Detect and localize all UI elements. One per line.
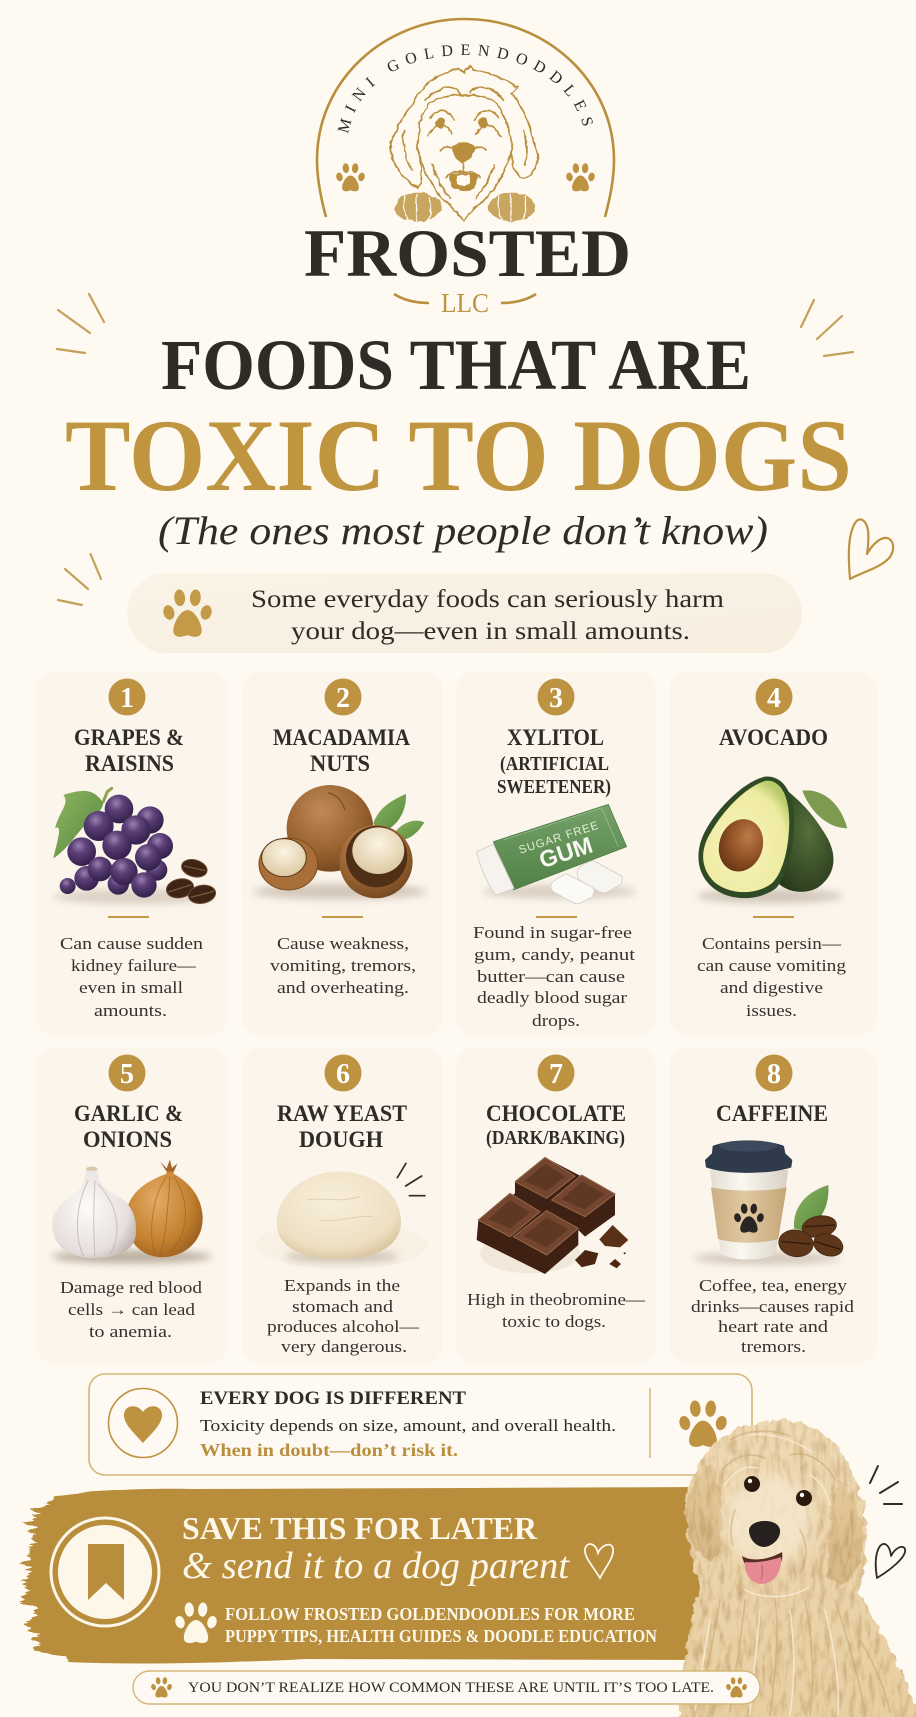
heading: CAFFEINE <box>716 1101 828 1126</box>
description <box>691 1276 855 1356</box>
illustration: sugar free gum: SUGAR FREE <box>517 819 601 857</box>
heading: CHOCOLATE <box>486 1101 626 1126</box>
dog mouth and tongue <box>742 1552 782 1584</box>
description <box>473 923 635 1030</box>
number badge 4: 4 <box>767 683 781 714</box>
fur strokes <box>694 1431 890 1715</box>
icon: paw left <box>150 1677 173 1697</box>
icon: paw <box>162 589 213 637</box>
number badge 2 <box>324 678 362 716</box>
description: amounts. <box>94 1001 167 1020</box>
description <box>697 934 847 1020</box>
number badge 6: 6 <box>336 1059 350 1090</box>
number badge 8: 8 <box>767 1059 781 1090</box>
follow text: FOLLOW FROSTED GOLDENDOODLES FOR MORE <box>225 1604 635 1624</box>
description: Cause weakness, <box>277 934 409 953</box>
title line 1: FOODS THAT ARE <box>161 325 751 405</box>
logo wordmark FROSTED: FROSTED <box>304 215 631 291</box>
description: and digestive <box>720 978 823 997</box>
heading: SWEETENER) <box>497 776 611 798</box>
decorative rays top left <box>57 294 104 353</box>
logo dog line drawing <box>390 66 537 222</box>
heading <box>497 725 611 798</box>
follow text: PUPPY TIPS, HEALTH GUIDES & DOODLE EDUCATION <box>225 1626 657 1646</box>
number badge 8 <box>756 1054 792 1092</box>
panel: 5 garlic and onions <box>36 1047 228 1364</box>
heading: DOUGH <box>299 1127 383 1152</box>
logo: Frosted Mini Goldendoodles <box>304 18 631 318</box>
number badge 1: 1 <box>120 683 134 714</box>
divider <box>108 916 149 918</box>
description: Can cause sudden <box>60 934 204 953</box>
dog nose <box>749 1521 780 1547</box>
heading <box>74 1101 183 1152</box>
logo paw right <box>565 163 596 191</box>
icon: white paw <box>174 1602 218 1643</box>
illustration: sugar free gum: GUM <box>536 832 596 873</box>
description: Damage red blood <box>60 1278 203 1297</box>
brush stroke background <box>28 1487 720 1663</box>
logo arch <box>317 19 614 217</box>
icon: outlined black heart <box>876 1544 905 1578</box>
logo LLC: LLC <box>441 288 489 318</box>
callout emphasis: When in doubt—don’t risk it. <box>200 1440 458 1460</box>
logo dog paws <box>394 192 536 222</box>
description: butter—can cause <box>477 967 625 986</box>
title line 2: TOXIC TO DOGS <box>65 399 852 513</box>
description: even in small <box>79 978 183 997</box>
panel: 8 caffeine <box>669 1047 877 1364</box>
panel: 4 avocado <box>669 671 877 1036</box>
number badge 3: 3 <box>549 683 563 714</box>
description: vomiting, tremors, <box>270 956 416 975</box>
follow text <box>225 1604 657 1646</box>
description: deadly blood sugar <box>477 988 627 1007</box>
intro pill <box>127 573 802 653</box>
intro pill: your dog—even in small amounts. <box>291 616 690 645</box>
heading: (ARTIFICIAL <box>500 753 609 775</box>
number badge 6 <box>324 1054 362 1092</box>
panel: 6 raw yeast dough <box>242 1047 443 1364</box>
description: stomach and <box>292 1297 394 1316</box>
panel: 2 macadamia nuts <box>242 671 443 1036</box>
description <box>267 1276 420 1356</box>
heading: XYLITOL <box>507 725 604 750</box>
description: Found in sugar-free <box>473 923 632 942</box>
heading <box>486 1101 626 1149</box>
divider <box>536 916 577 918</box>
number badge 5 <box>108 1054 146 1092</box>
callout: every dog is different <box>89 1374 752 1475</box>
number badge 1 <box>108 678 146 716</box>
heading: GRAPES & <box>74 725 184 750</box>
logo curved text: MINI GOLDENDODDLES <box>338 44 593 134</box>
dog silhouette and coat <box>678 1420 916 1717</box>
subtitle: (The ones most people don’t know) <box>158 508 768 553</box>
illustration: garlic and onion <box>52 1159 212 1263</box>
icon: paw right <box>725 1677 748 1697</box>
heading: (DARK/BAKING) <box>486 1127 625 1149</box>
number badge 5: 5 <box>120 1059 134 1090</box>
icon: outlined heart <box>849 519 893 579</box>
panel: save banner <box>28 1487 720 1663</box>
illustration: dough ball <box>256 1163 428 1269</box>
heading: ONIONS <box>83 1127 172 1152</box>
number badge 2: 2 <box>336 683 350 714</box>
banner script line: & send it to a dog parent <box>182 1545 570 1587</box>
description <box>467 1290 646 1331</box>
description <box>60 934 204 1020</box>
description: issues. <box>746 1001 797 1020</box>
description: very dangerous. <box>281 1337 407 1356</box>
description: heart rate and <box>718 1317 829 1336</box>
heading <box>277 1101 407 1152</box>
dog muzzle highlight <box>724 1474 812 1566</box>
heading: NUTS <box>310 751 370 776</box>
heading: GARLIC & <box>74 1101 183 1126</box>
illustration: sugar free gum <box>477 804 637 904</box>
number badge 4 <box>756 678 792 716</box>
description: Coffee, tea, energy <box>699 1276 848 1295</box>
icon: outlined heart <box>585 1544 613 1578</box>
description: and overheating. <box>277 978 409 997</box>
dog ears <box>685 1462 864 1583</box>
heading <box>273 725 410 776</box>
panel: 3 xylitol <box>456 671 656 1036</box>
banner heading: SAVE THIS FOR LATER <box>182 1510 538 1546</box>
decorative rays mid left <box>58 554 101 605</box>
description: produces alcohol— <box>267 1317 420 1336</box>
heading <box>74 725 184 776</box>
motion lines <box>397 1163 425 1196</box>
icon: bookmark badge <box>51 1518 159 1626</box>
description: kidney failure— <box>71 956 197 975</box>
footer text: YOU DON’T REALIZE HOW COMMON THESE ARE UNTIL IT’S TOO LATE. <box>188 1680 714 1696</box>
heading: MACADAMIA <box>273 725 410 750</box>
intro text: Some everyday foods can seriously harm <box>251 584 724 613</box>
divider <box>322 916 363 918</box>
logo paw left <box>335 163 366 191</box>
illustration: macadamia nuts <box>253 785 427 900</box>
illustration: avocado <box>697 777 847 903</box>
description: tremors. <box>741 1337 806 1356</box>
description: cells → can lead <box>68 1300 196 1319</box>
dog eyes <box>744 1476 812 1506</box>
illustration: coffee cup with paw <box>693 1140 846 1264</box>
number badge 7: 7 <box>549 1059 563 1090</box>
heading: RAW YEAST <box>277 1101 407 1126</box>
icon: heart in circle <box>108 1388 178 1458</box>
description: toxic to dogs. <box>502 1312 606 1331</box>
illustration: dark chocolate <box>477 1157 628 1274</box>
logo LLC <box>394 288 536 318</box>
description: drinks—causes rapid <box>691 1297 855 1316</box>
panel: 7 chocolate <box>456 1047 656 1364</box>
callout body: Toxicity depends on size, amount, and overall health. <box>200 1416 616 1435</box>
illustration: grapes with raisins <box>53 788 217 906</box>
description: drops. <box>532 1011 580 1030</box>
divider <box>753 916 794 918</box>
description: to anemia. <box>89 1322 172 1341</box>
description: can cause vomiting <box>697 956 847 975</box>
decorative rays top right <box>801 300 853 356</box>
description <box>60 1278 203 1341</box>
heading: AVOCADO <box>719 725 828 750</box>
illustration: goldendoodle dog <box>678 1420 916 1717</box>
description: Expands in the <box>284 1276 400 1295</box>
number badge 7 <box>538 1054 574 1092</box>
description <box>270 934 416 997</box>
description: Contains persin— <box>702 934 842 953</box>
icon: paw <box>678 1400 728 1447</box>
description: High in theobromine— <box>467 1290 646 1309</box>
callout heading: EVERY DOG IS DIFFERENT <box>200 1388 466 1409</box>
panel: 1 grapes and raisins <box>36 671 228 1036</box>
number badge 3 <box>538 678 574 716</box>
description: gum, candy, peanut <box>474 945 635 964</box>
footer pill <box>133 1671 760 1704</box>
heading: RAISINS <box>85 751 174 776</box>
motion lines by dog <box>870 1466 902 1504</box>
